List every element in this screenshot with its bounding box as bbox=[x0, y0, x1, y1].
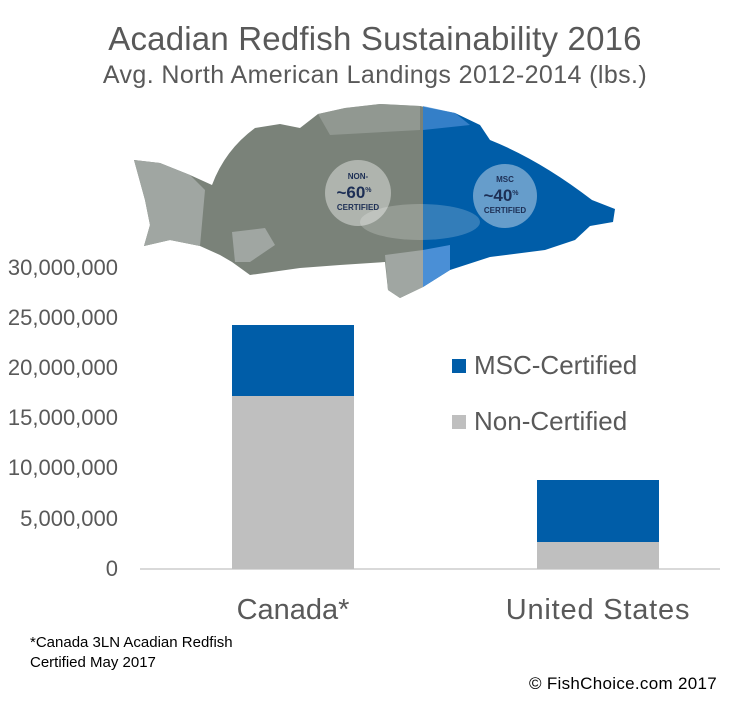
y axis labels: 20,000,000 bbox=[8, 355, 118, 380]
tail lighter bbox=[134, 160, 205, 246]
circle: non-certified: ~60 bbox=[336, 183, 365, 202]
circle: non-certified bbox=[325, 160, 391, 226]
title: Acadian Redfish Sustainability 2016 bbox=[108, 20, 642, 57]
subtitle: Avg. North American Landings 2012-2014 (lbs.) bbox=[103, 61, 647, 89]
y axis labels: 30,000,000 bbox=[8, 255, 118, 280]
circle: non-certified: CERTIFIED bbox=[337, 203, 379, 212]
footnote bbox=[30, 634, 233, 671]
x label Canada: Canada* bbox=[237, 594, 349, 626]
circle: MSC certified: CERTIFIED bbox=[484, 206, 526, 215]
circle: MSC certified bbox=[473, 164, 537, 228]
legend: Non-Certified bbox=[474, 406, 627, 436]
footnote: Certified May 2017 bbox=[30, 654, 156, 671]
y axis labels: 0 bbox=[106, 556, 118, 581]
circle: MSC certified: ~40 bbox=[483, 186, 512, 205]
legend: MSC-Certified bbox=[474, 350, 637, 380]
circle: MSC certified: MSC bbox=[496, 175, 514, 184]
credit: © FishChoice.com 2017 bbox=[529, 674, 717, 693]
dorsal spines bbox=[318, 104, 420, 135]
x label US: United States bbox=[506, 594, 690, 626]
y axis labels: 5,000,000 bbox=[20, 506, 118, 531]
y axis labels: 10,000,000 bbox=[8, 455, 118, 480]
circle: MSC certified: % bbox=[512, 190, 519, 197]
fish illustration bbox=[134, 104, 615, 298]
circle: non-certified: NON- bbox=[348, 172, 369, 181]
legend bbox=[452, 350, 637, 436]
y axis labels: 15,000,000 bbox=[8, 405, 118, 430]
baseline bbox=[140, 568, 720, 570]
y axis labels bbox=[8, 255, 118, 581]
circle: non-certified: % bbox=[365, 187, 372, 194]
footnote: *Canada 3LN Acadian Redfish bbox=[30, 634, 233, 651]
y axis labels: 25,000,000 bbox=[8, 305, 118, 330]
bar: United States bbox=[537, 480, 659, 569]
bar: Canada bbox=[232, 325, 354, 569]
